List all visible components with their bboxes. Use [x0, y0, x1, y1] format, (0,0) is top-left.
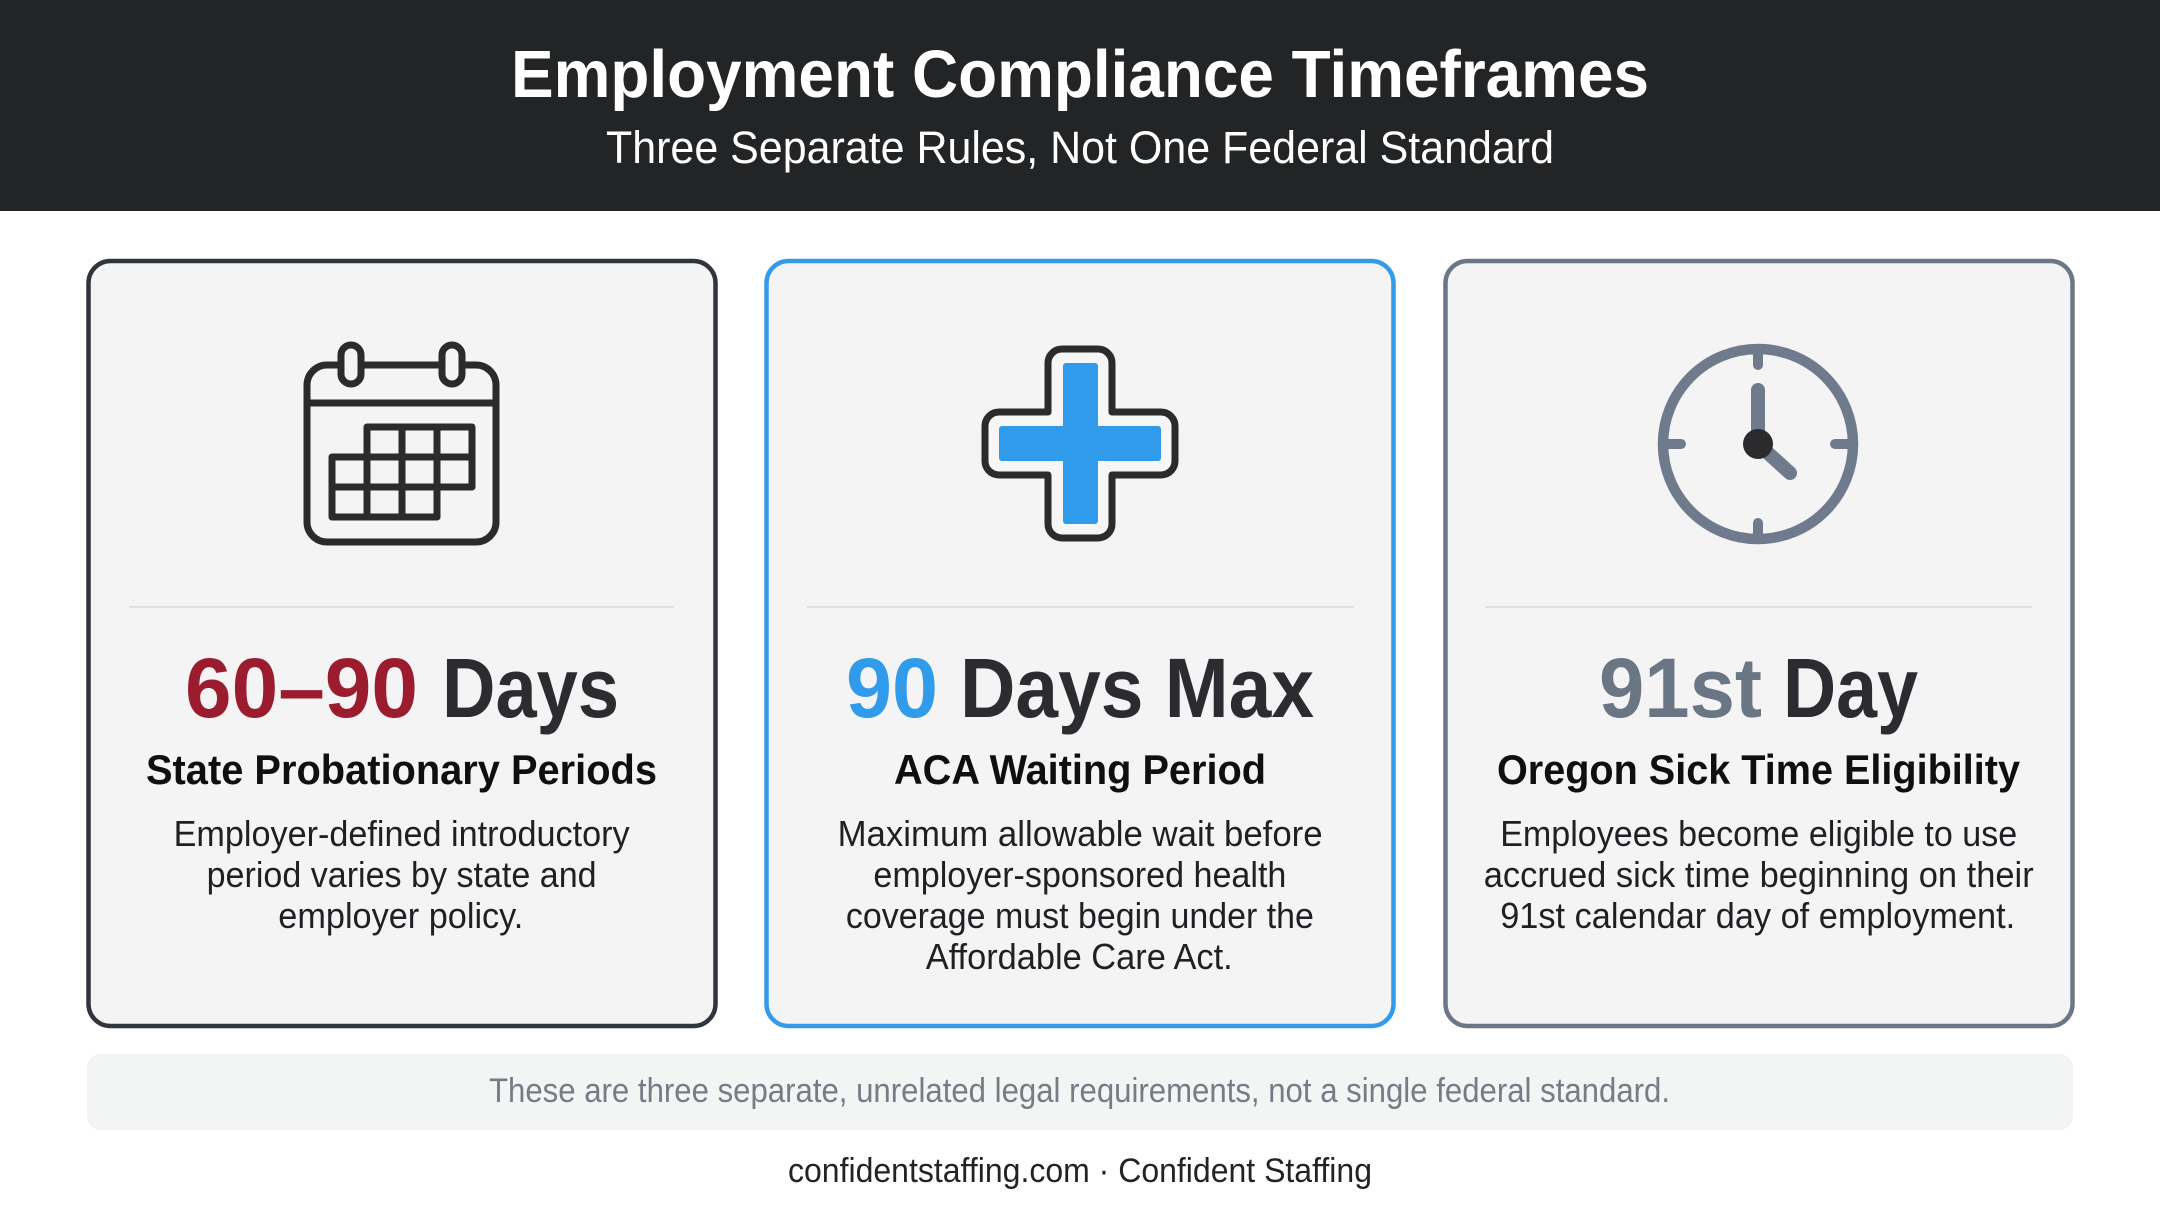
subtitle: Three Separate Rules, Not One Federal Standard — [606, 122, 1554, 173]
card description: Employer-defined introductory — [174, 813, 630, 854]
panel: Oregon sick time eligibility — [1446, 261, 2072, 1026]
note text: These are three separate, unrelated legal requirements, not a single federal standard. — [489, 1072, 1670, 1110]
panel: state probationary periods — [88, 261, 716, 1026]
card description: accrued sick time beginning on their — [1484, 854, 2034, 895]
card description: period varies by state and — [207, 854, 597, 895]
big number: 60–90 Days: Days — [442, 641, 619, 735]
icon: calendar — [307, 345, 496, 542]
big number: 91st Day — [1599, 641, 1918, 735]
big number: 60–90 Days — [185, 641, 619, 735]
panel: ACA waiting period — [766, 261, 1394, 1026]
card description: Employees become eligible to use — [1500, 813, 2017, 854]
header band — [0, 0, 2160, 211]
big number: 90 Days Max: Days Max — [960, 641, 1314, 735]
card description: coverage must begin under the — [846, 895, 1314, 936]
big number: 91st Day: 91st — [1599, 641, 1762, 735]
big number: 91st Day: Day — [1783, 641, 1918, 735]
card description — [174, 813, 630, 936]
card description: employer policy. — [278, 895, 523, 936]
big number: 90 Days Max: 90 — [846, 641, 938, 735]
card description — [838, 813, 1323, 977]
card description — [1484, 813, 2034, 936]
card heading: ACA Waiting Period — [894, 746, 1266, 793]
note bar — [87, 1054, 2073, 1130]
card description: 91st calendar day of employment. — [1500, 895, 2015, 936]
card description: Maximum allowable wait before — [838, 813, 1323, 854]
footer source: confidentstaffing.com · Confident Staffing — [788, 1152, 1372, 1190]
card heading: State Probationary Periods — [146, 746, 657, 793]
big number: 60–90 Days: 60–90 — [185, 641, 418, 735]
icon: clock — [1663, 349, 1853, 539]
card heading: Oregon Sick Time Eligibility — [1497, 746, 2021, 793]
title: Employment Compliance Timeframes — [511, 37, 1649, 112]
card description: employer-sponsored health — [873, 854, 1286, 895]
icon: medical cross — [985, 349, 1175, 538]
card description: Affordable Care Act. — [926, 936, 1233, 977]
